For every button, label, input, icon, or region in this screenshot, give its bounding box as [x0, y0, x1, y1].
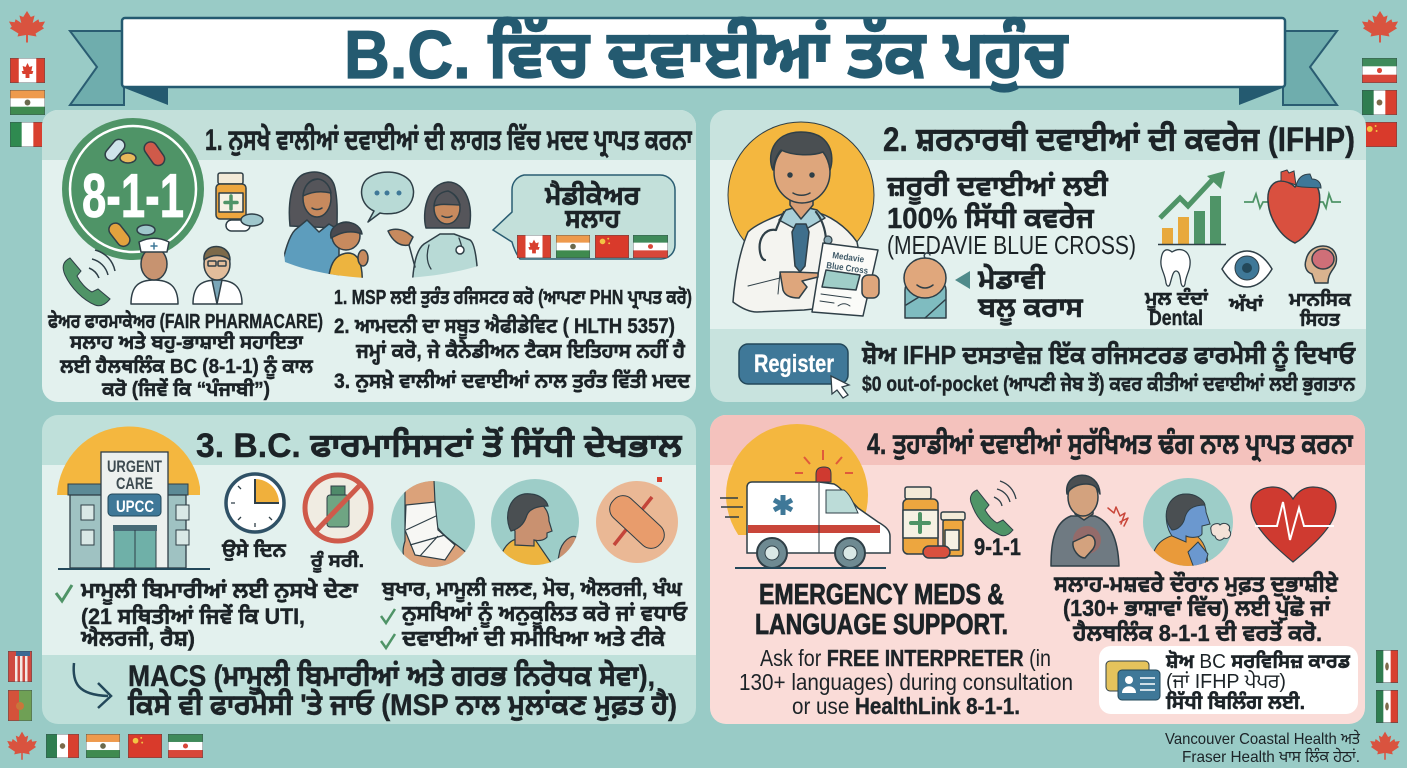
panel 1: prescription cost help: [42, 110, 696, 402]
labels: dental eyes mental: [1144, 287, 1352, 331]
triangle pointer: [955, 271, 970, 289]
text: direct coverage: ਜ਼ਰੂਰੀ ਦਵਾਈਆਂ ਲਈ: [886, 169, 1109, 205]
text: fair pharmacare advice: [47, 309, 323, 401]
child: [328, 221, 369, 278]
icon: bandage on cut: [596, 477, 678, 563]
illustration: family talking to nurse: [283, 172, 478, 290]
illustration: person with chest pain: [1051, 475, 1128, 566]
text: fair pharmacare advice: ਸਲਾਹ ਅਤੇ ਬਹੁ-ਭਾਸ਼ਾਈ ਸਹਾਇਤਾ: [69, 330, 304, 354]
icon: baby: [904, 253, 946, 318]
icon: heart with pulse: [1251, 487, 1336, 562]
text: fair pharmacare advice: ਫੇਅਰ ਫਾਰਮਾਕੇਅਰ (FAIR PHARMACARE): [47, 309, 323, 333]
text: emergency meds: EMERGENCY MEDS &: [759, 579, 1004, 611]
callout: services card: ਸਿੱਧੀ ਬਿਲਿੰਗ ਲਈ.: [1165, 690, 1305, 714]
icon: pharmacist: [193, 246, 242, 304]
ribbon face: [122, 18, 1285, 87]
panel 1 background: [42, 110, 696, 402]
nurse: [388, 182, 478, 290]
mother: [284, 171, 340, 276]
panel 3: direct care from pharmacists: [42, 415, 696, 724]
decorative flags: left bottom: [7, 651, 203, 760]
text: MACS: ਕਿਸੇ ਵੀ ਫਾਰਮੇਸੀ 'ਤੇ ਜਾਓ (MSP ਨਾਲ ਮੁਲਾਂਕਣ ਮੁਫ਼ਤ ਹੈ): [127, 687, 677, 722]
icon: clock: [226, 474, 284, 532]
text: interpreter in Punjabi: (130+ ਭਾਸ਼ਾਵਾਂ ਵਿੱਚ) ਲਈ ਪੁੱਛੋ ਜਾਂ: [1063, 595, 1331, 621]
document: Blue Cross: [826, 260, 869, 276]
text: show IFHP document: [861, 340, 1356, 396]
decorative flags and leaves: right top: [1362, 11, 1398, 147]
text: ask for interpreter: Ask for FREE INTERPRETER (in: [760, 645, 1051, 671]
icon: nurse: [131, 238, 178, 304]
text: emergency meds: LANGUAGE SUPPORT.: [755, 609, 1008, 641]
text: numbered steps: [334, 285, 692, 393]
icon: ID cards: [1106, 661, 1160, 700]
text: numbered steps: ਜਮ੍ਹਾਂ ਕਰੋ, ਜੇ ਕੈਨੇਡੀਅਨ ਟੈਕਸ ਇਤਿਹਾਸ ਨਹੀਂ ਹੈ: [355, 338, 686, 365]
list: conditions and services: [381, 576, 688, 651]
panel 1 heading: 1. ਨੁਸਖੇ ਵਾਲੀਆਂ ਦਵਾਈਆਂ ਦੀ ਲਾਗਤ ਵਿੱਚ ਮਦਦ ਪ੍ਰਾਪਤ ਕਰਨਾ: [205, 122, 692, 159]
document: Medavie: [832, 250, 865, 264]
labels: dental eyes mental: ਅੱਖਾਂ: [1228, 294, 1264, 316]
text: emergency meds: [755, 579, 1008, 641]
callout: medicare advice: ਮੈਡੀਕੇਅਰ: [544, 180, 641, 211]
illustration: urgent care building: [57, 426, 210, 569]
text: direct coverage: (MEDAVIE BLUE CROSS): [887, 230, 1136, 260]
register button: Register: [754, 350, 834, 378]
icon: head with brain: [1305, 246, 1336, 283]
text: ask for interpreter: [739, 645, 1073, 719]
icon: 8-1-1 badge: [62, 118, 204, 260]
text: ask for interpreter: 130+ languages) during consultation: [739, 669, 1073, 695]
text: numbered steps: 2. ਆਮਦਨੀ ਦਾ ਸਬੂਤ ਐਫੀਡੇਵਿਟ ( HLTH 5357): [334, 314, 675, 340]
text: interpreter in Punjabi: [1053, 571, 1339, 646]
illustration: person short of breath: [1143, 478, 1233, 570]
illustration: urgent care building: URGENT: [107, 457, 162, 476]
text: fair pharmacare advice: ਲਈ ਹੈਲਥਲਿੰਕ BC (8-1-1) ਨੂੰ ਕਾਲ: [59, 354, 314, 380]
illustration: urgent care building: UPCC: [116, 497, 154, 516]
document: [812, 243, 878, 316]
illustration: ambulance: [720, 424, 890, 568]
label: same day: ਉਸੇ ਦਿਨ: [221, 538, 286, 562]
title: B.C. ਵਿੱਚ ਦਵਾਈਆਂ ਤੱਕ ਪਹੁੰਚ: [344, 17, 1069, 93]
labels: dental eyes mental: ਸਿਹਤ: [1299, 308, 1341, 331]
list: prescribing for minor ailments: ਐਲਰਜੀ, ਰੈਸ਼): [80, 626, 195, 651]
icon: medicine bottle: [216, 173, 263, 231]
panel 3 background: [42, 415, 696, 724]
text: medavie blue cross: ਮੇਡਾਵੀ: [977, 262, 1046, 295]
panel 2: refugee coverage: [710, 110, 1366, 402]
list: prescribing for minor ailments: [56, 578, 358, 651]
panel 4: getting medicines safely: [710, 415, 1365, 724]
register button: [739, 344, 849, 398]
icon: no medicine: [305, 475, 371, 541]
icon: tooth: [1161, 250, 1190, 287]
list: conditions and services: ਬੁਖਾਰ, ਮਾਮੂਲੀ ਜਲਣ, ਮੋਚ, ਐਲਰਜੀ, ਖੰਘ: [381, 576, 683, 603]
footer note: Vancouver Coastal Health ਅਤੇ: [1165, 729, 1360, 748]
illustration: urgent care building: CARE: [116, 474, 153, 493]
text: interpreter in Punjabi: ਹੈਲਥਲਿੰਕ 8-1-1 ਦੀ ਵਰਤੋਂ ਕਰੋ.: [1072, 620, 1322, 646]
list: prescribing for minor ailments: ਮਾਮੂਲੀ ਬਿਮਾਰੀਆਂ ਲਈ ਨੁਸਖੇ ਦੇਣਾ: [80, 578, 358, 605]
label: 9-1-1: 9-1-1: [974, 534, 1021, 561]
callout: services card: (ਜਾਂ IFHP ਪੇਪਰ): [1166, 669, 1286, 693]
list: prescribing for minor ailments: (21 ਸਥਿਤੀਆਂ ਜਿਵੇਂ ਕਿ UTI,: [81, 604, 305, 629]
text: ask for interpreter: or use HealthLink 8-1-1.: [792, 693, 1020, 719]
icon: bandaged ankle: [391, 480, 475, 568]
ribbon tail right: [1239, 31, 1337, 105]
ribbon tail left: [70, 31, 168, 105]
text: MACS: MACS (ਮਾਮੂਲੀ ਬਿਮਾਰੀਆਂ ਅਤੇ ਗਰਭ ਨਿਰੋਧਕ ਸੇਵਾ),: [128, 658, 655, 695]
footer note: [1165, 729, 1360, 766]
text: medavie blue cross: [977, 262, 1084, 326]
text: fair pharmacare advice: ਕਰੋ (ਜਿਵੇਂ ਕਿ “ਪੰਜਾਬੀ”): [101, 377, 270, 401]
labels: dental eyes mental: Dental: [1149, 307, 1203, 330]
callout: services card: ਸ਼ੋਅ BC ਸਰਵਿਸਿਜ਼ ਕਾਰਡ: [1165, 649, 1350, 673]
panel 4 background: [710, 415, 1365, 724]
text: interpreter in Punjabi: ਸਲਾਹ-ਮਸ਼ਵਰੇ ਦੌਰਾਨ ਮੁਫ਼ਤ ਦੁਭਾਸ਼ੀਏ: [1053, 571, 1339, 597]
list: conditions and services: ਦਵਾਈਆਂ ਦੀ ਸਮੀਖਿਆ ਅਤੇ ਟੀਕੇ: [401, 626, 666, 651]
callout: medicare advice: [493, 175, 675, 259]
text: MACS: [127, 658, 677, 722]
panel 2 background: [710, 110, 1366, 402]
text: show IFHP document: ਸ਼ੋਅ IFHP ਦਸਤਾਵੇਜ਼ ਇੱਕ ਰਜਿਸਟਰਡ ਫਾਰਮੇਸੀ ਨੂੰ ਦਿਖਾਓ: [861, 340, 1356, 372]
callout: services card: [1099, 646, 1358, 714]
text: direct coverage: 100% ਸਿੱਧੀ ਕਵਰੇਜ: [887, 201, 1095, 235]
title banner: [70, 17, 1337, 105]
label: no prescription: ਰੂੰ ਸਰੀ.: [310, 551, 364, 573]
illustration: doctor with document: [728, 122, 879, 316]
icon: person coughing: [491, 479, 579, 570]
callout: medicare advice: ਸਲਾਹ: [564, 204, 620, 234]
icon: medicine bottles: [903, 487, 965, 558]
icon: 8-1-1 badge: 8-1-1: [82, 162, 184, 231]
text: numbered steps: 1. MSP ਲਈ ਤੁਰੰਤ ਰਜਿਸਟਰ ਕਰੋ (ਆਪਣਾ PHN ਪ੍ਰਾਪਤ ਕਰੋ): [334, 285, 692, 310]
icon: telephone: [63, 250, 115, 306]
labels: dental eyes mental: ਮੂਲ ਦੰਦਾਂ: [1144, 287, 1209, 312]
decorative flags: right bottom: [1370, 650, 1400, 760]
text: numbered steps: 3. ਨੁਸਖ਼ੇ ਵਾਲੀਆਂ ਦਵਾਈਆਂ ਨਾਲ ਤੁਰੰਤ ਵਿੱਤੀ ਮਦਦ: [334, 369, 691, 393]
callout flags: [517, 235, 668, 258]
icon: rising chart: [1158, 171, 1226, 244]
text: medavie blue cross: ਬਲੂ ਕਰਾਸ: [977, 292, 1084, 326]
text: direct coverage: [886, 169, 1136, 260]
decorative flags and leaves: left top: [9, 11, 45, 147]
footer note: Fraser Health ਖਾਸ ਲਿੰਕ ਹੇਠਾਂ.: [1182, 747, 1360, 766]
icon: eye: [1222, 251, 1272, 287]
panel 3 heading: 3. B.C. ਫਾਰਮਾਸਿਸਟਾਂ ਤੋਂ ਸਿੱਧੀ ਦੇਖਭਾਲ: [196, 426, 683, 465]
list: conditions and services: ਨੁਸਖਿਆਂ ਨੂੰ ਅਨੁਕੂਲਿਤ ਕਰੋ ਜਾਂ ਵਧਾਓ: [401, 600, 688, 628]
icon: phone: [970, 481, 1016, 536]
labels: dental eyes mental: ਮਾਨਸਿਕ: [1288, 288, 1352, 311]
speech bubble: [362, 172, 414, 222]
pointing hand: [780, 272, 818, 298]
icon: heart: [1244, 170, 1341, 243]
arrow: [74, 663, 111, 708]
